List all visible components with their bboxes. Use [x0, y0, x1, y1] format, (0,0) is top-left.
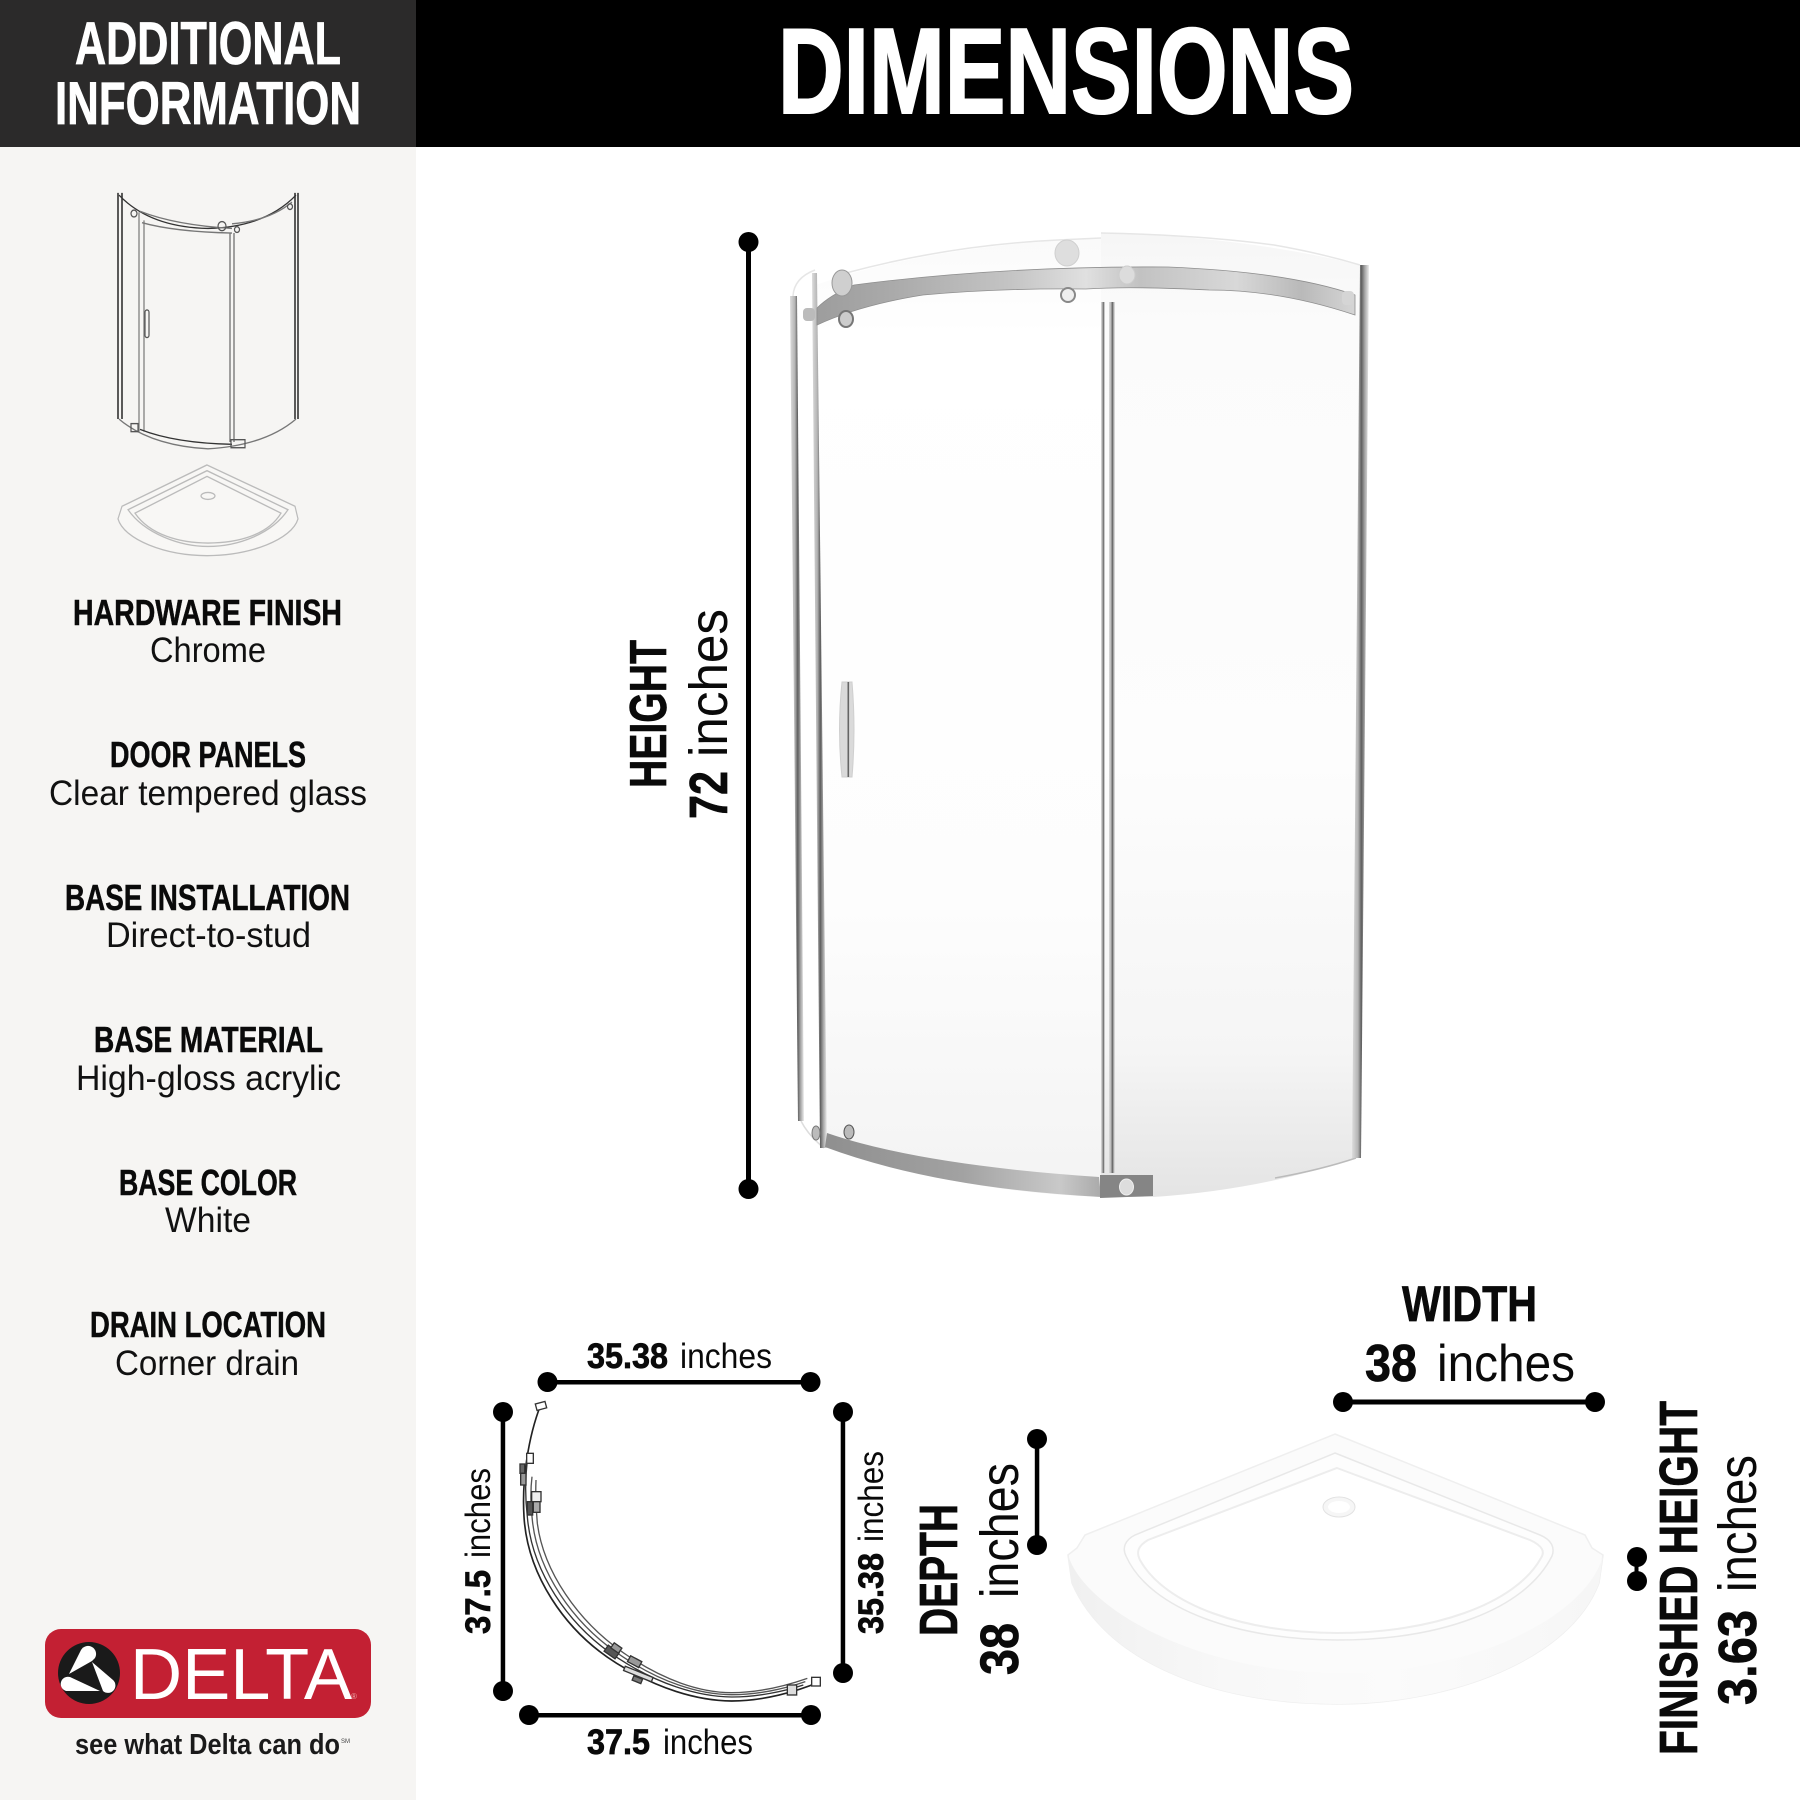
- bottom bracket: [1100, 1175, 1153, 1198]
- spec: hardware finish: [73, 592, 342, 670]
- spec: base installation: [65, 877, 350, 955]
- rail rollers: [803, 240, 1354, 327]
- door edge post: [812, 273, 827, 1148]
- dimension: left: [459, 1402, 513, 1701]
- title banner: DIMENSIONS: [778, 3, 1354, 139]
- spec: drain location: Corner drain: [115, 1344, 299, 1383]
- door handle: [840, 682, 854, 777]
- left outer post: [790, 296, 804, 1121]
- brand logo: SM: [341, 1739, 350, 1745]
- title banner: [416, 0, 1800, 147]
- spec: door panels: [49, 734, 367, 813]
- shower base illustration: [1068, 1434, 1603, 1704]
- top view curve: [520, 1401, 820, 1701]
- bottom rail: [825, 1133, 1101, 1197]
- glass outline: [793, 233, 1360, 1178]
- width value: 38: [1365, 1335, 1417, 1393]
- base basin: [1138, 1468, 1543, 1633]
- finished height dimension: [1627, 1401, 1768, 1755]
- icon: enclosure line drawing: [118, 193, 298, 449]
- left door glass: [815, 238, 1101, 1197]
- sidebar header: INFORMATION: [55, 70, 361, 137]
- dimension: bottom: [519, 1705, 821, 1762]
- height label: HEIGHT: [620, 640, 678, 788]
- height value: 72: [679, 771, 739, 819]
- spec: base material: High-gloss acrylic: [76, 1059, 341, 1098]
- depth label: DEPTH: [909, 1504, 969, 1636]
- spec: base color: White: [165, 1201, 251, 1240]
- top rail: [817, 267, 1355, 325]
- brand logo: [45, 1629, 371, 1761]
- depth measure line: [1027, 1429, 1047, 1555]
- spec: base material: [76, 1019, 341, 1098]
- dimension: right: inches: [852, 1451, 891, 1542]
- height value: inches: [679, 609, 739, 757]
- brand logo: DELTA: [130, 1635, 352, 1715]
- spec: hardware finish: HARDWARE FINISH: [73, 592, 342, 633]
- finished height label: FINISHED HEIGHT: [1649, 1401, 1709, 1755]
- center posts: [1101, 302, 1115, 1173]
- height dimension: [620, 232, 758, 1199]
- dimension: left: 37.5: [459, 1570, 498, 1634]
- finished height value: [1708, 1455, 1768, 1705]
- spec: drain location: [90, 1304, 326, 1383]
- spec: door panels: DOOR PANELS: [110, 734, 306, 775]
- width value: [1365, 1335, 1575, 1393]
- height value: [679, 609, 739, 819]
- dimension: top: [538, 1337, 820, 1392]
- drain: [1323, 1497, 1355, 1517]
- spec: base installation: Direct-to-stud: [106, 916, 311, 955]
- brand logo: ®: [351, 1692, 357, 1701]
- base ledge: [1124, 1453, 1553, 1640]
- depth value: inches: [970, 1463, 1030, 1598]
- depth value: [970, 1463, 1030, 1675]
- dimension: top: inches: [680, 1337, 772, 1376]
- brand logo: see what Delta can do: [75, 1729, 340, 1761]
- width measure line: [1333, 1392, 1605, 1412]
- spec: door panels: Clear tempered glass: [49, 774, 367, 813]
- width label: WIDTH: [1402, 1276, 1537, 1332]
- width dimension: [1333, 1276, 1605, 1412]
- dimension: bottom: inches: [663, 1723, 753, 1762]
- dimension: left: inches: [459, 1468, 498, 1558]
- finished height measure: [1627, 1547, 1647, 1591]
- spec: drain location: DRAIN LOCATION: [90, 1304, 326, 1345]
- finished height value: 3.63: [1708, 1610, 1768, 1705]
- spec: base installation: BASE INSTALLATION: [65, 877, 350, 918]
- spec: hardware finish: Chrome: [150, 631, 266, 670]
- spec: base color: [119, 1162, 297, 1240]
- depth dimension: [909, 1429, 1047, 1675]
- icon: base line drawing: [118, 465, 298, 556]
- sidebar header: [0, 0, 416, 147]
- right post: [1352, 265, 1369, 1158]
- dimension: right: [833, 1402, 891, 1683]
- right glass panel: [1101, 233, 1360, 1197]
- base body: [1068, 1434, 1603, 1704]
- finished height value: inches: [1708, 1455, 1768, 1592]
- width value: inches: [1437, 1335, 1575, 1393]
- dimension: top: 35.38: [587, 1337, 668, 1376]
- base front face: [1068, 1555, 1603, 1704]
- panel: additional information sidebar: [0, 0, 416, 1800]
- shower enclosure illustration: [790, 233, 1369, 1198]
- depth value: 38: [970, 1623, 1030, 1675]
- dimension: bottom: 37.5: [587, 1723, 650, 1762]
- height measure line: [738, 232, 758, 1199]
- dimension: right: 35.38: [852, 1553, 891, 1634]
- sidebar header: ADDITIONAL: [75, 10, 341, 77]
- spec: base color: BASE COLOR: [119, 1162, 297, 1203]
- lower door rollers: [812, 1125, 854, 1140]
- top view diagram: [459, 1337, 891, 1762]
- spec: base material: BASE MATERIAL: [94, 1019, 323, 1060]
